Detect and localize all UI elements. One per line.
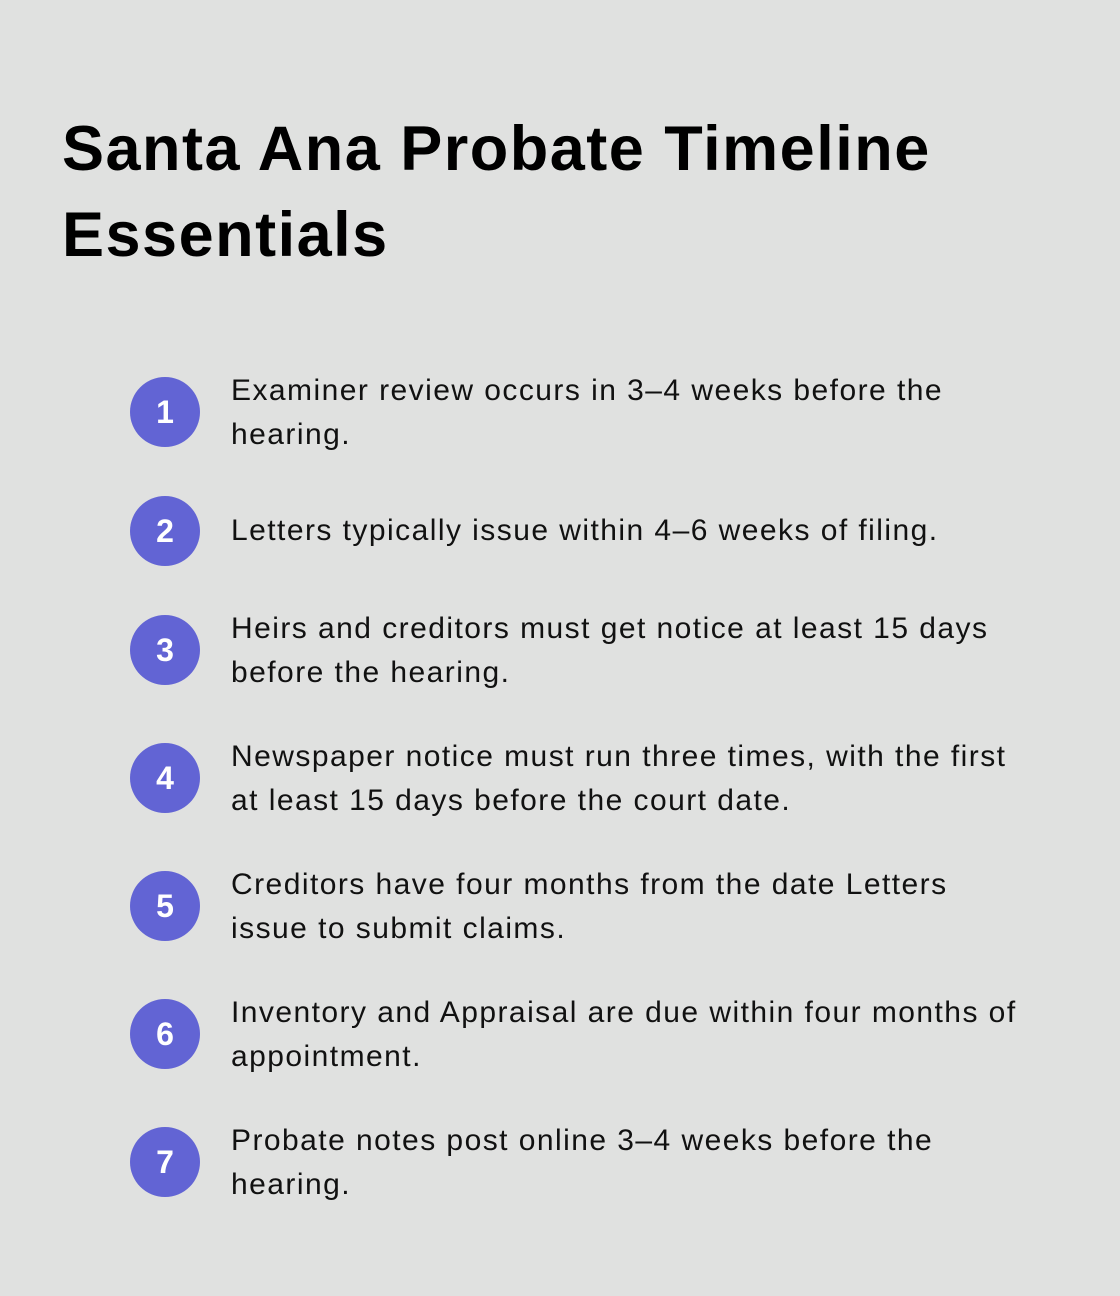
item 5: Creditors have four months from the date Letters (231, 868, 948, 901)
item 6: appointment. (231, 1040, 422, 1073)
item 7 (130, 1124, 933, 1201)
item 1: hearing. (231, 418, 351, 451)
title: Essentials (62, 200, 389, 270)
item 6: 6 (156, 1016, 174, 1052)
item 7: hearing. (231, 1168, 351, 1201)
item 4 (130, 740, 1006, 817)
item 3: 3 (156, 632, 174, 668)
item 4: Newspaper notice must run three times, with the first (231, 740, 1006, 773)
item 5: issue to submit claims. (231, 912, 566, 945)
item 7: Probate notes post online 3–4 weeks before the (231, 1124, 933, 1157)
item 4: 4 (156, 760, 174, 796)
item 4: at least 15 days before the court date. (231, 784, 791, 817)
item 3 (130, 612, 988, 689)
item 2: 2 (156, 513, 174, 549)
item 2 (130, 496, 939, 566)
item 3: before the hearing. (231, 656, 510, 689)
item 1: Examiner review occurs in 3–4 weeks before the (231, 374, 943, 407)
title (62, 114, 931, 270)
item 5 (130, 868, 948, 945)
item 5: 5 (156, 888, 174, 924)
item 6: Inventory and Appraisal are due within four months of (231, 996, 1017, 1029)
item 2: Letters typically issue within 4–6 weeks of filing. (231, 514, 939, 547)
item 3: Heirs and creditors must get notice at least 15 days (231, 612, 988, 645)
item 7: 7 (156, 1144, 174, 1180)
item 6 (130, 996, 1017, 1073)
item 1 (130, 374, 943, 451)
item 1: 1 (156, 394, 174, 430)
title: Santa Ana Probate Timeline (62, 114, 931, 184)
